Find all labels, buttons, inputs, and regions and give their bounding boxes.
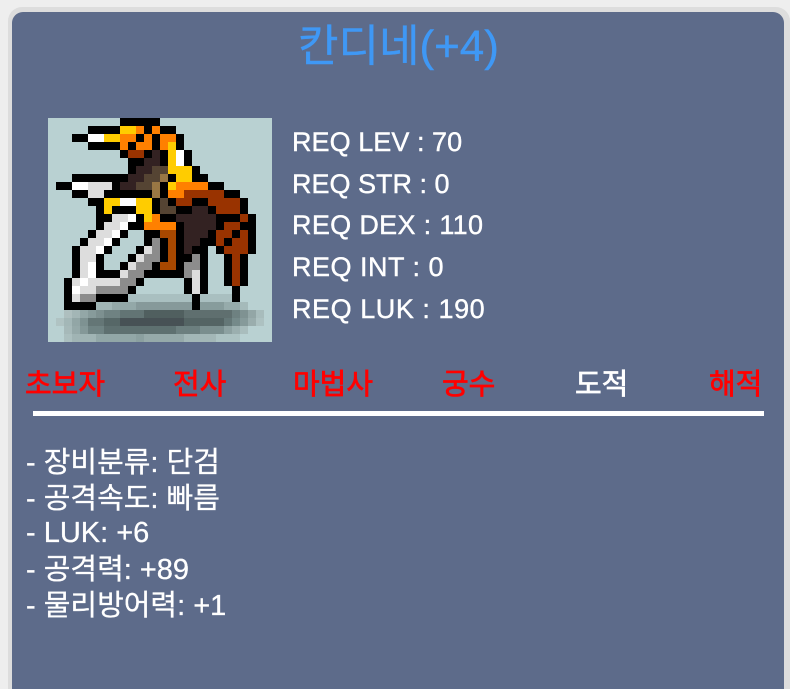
title: 칸디네(+4) (298, 22, 499, 71)
required luck: REQ LUK : 190 (292, 294, 485, 324)
divider rule (33, 411, 764, 416)
job: beginner: 초보자 (25, 369, 105, 401)
job class row (25, 369, 762, 401)
job: pirate: 해적 (709, 369, 762, 401)
job: archer: 궁수 (442, 369, 495, 401)
stat: equipment type: - 장비분류: 단검 (26, 447, 220, 479)
required dexterity: REQ DEX : 110 (292, 210, 483, 240)
job: warrior: 전사 (173, 369, 226, 401)
stat: physical defense: - 물리방어력: +1 (26, 590, 226, 622)
job: thief (available): 도적 (575, 369, 628, 401)
stat: LUK: - LUK: +6 (26, 517, 149, 549)
job: magician: 마법사 (293, 369, 373, 401)
stat: attack power: - 공격력: +89 (26, 554, 189, 586)
icon: dagger item sprite (48, 118, 272, 342)
required level: REQ LEV : 70 (292, 127, 462, 157)
required strength: REQ STR : 0 (292, 169, 450, 199)
item stats list (26, 447, 226, 622)
stat: attack speed: - 공격속도: 빠름 (26, 483, 220, 515)
requirements list (292, 127, 485, 324)
required intelligence: REQ INT : 0 (292, 252, 444, 282)
